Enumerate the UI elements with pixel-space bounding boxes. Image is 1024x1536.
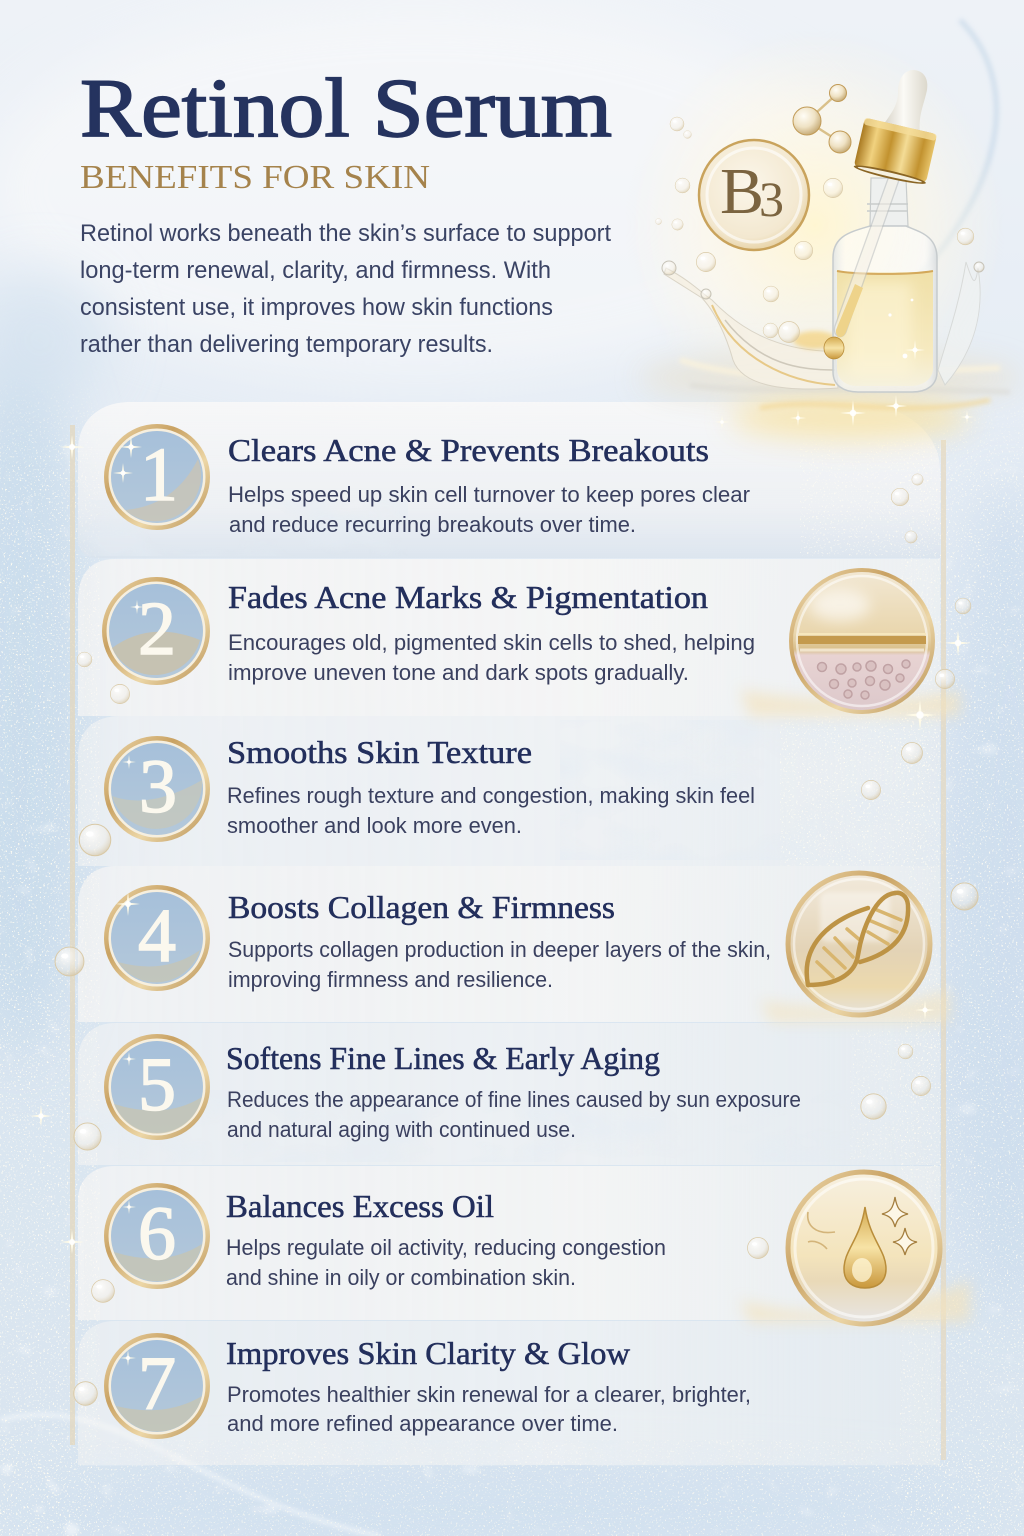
row 4 text: Boosts Collagen & Firmness [228, 889, 615, 925]
water surface under bottle [640, 352, 1020, 440]
icon: skin layers [791, 570, 933, 712]
medallion 6: 6 [138, 1192, 176, 1276]
row 1 text: Helps speed up skin cell turnover to keep pores clear [228, 482, 750, 507]
row 4 text [228, 889, 771, 992]
bottle neck [870, 178, 908, 226]
row 3 text: Refines rough texture and congestion, making skin feel [227, 783, 755, 808]
hero glow behind bottle [625, 30, 1005, 420]
panel: row 5 [78, 1023, 940, 1165]
row sparkle dust [780, 440, 940, 1160]
intro text: Retinol works beneath the skin’s surface to support [80, 220, 611, 247]
row 7 text: Promotes healthier skin renewal for a clearer, brighter, [227, 1382, 751, 1407]
row 5 text: Softens Fine Lines & Early Aging [226, 1040, 660, 1076]
row 2 text: improve uneven tone and dark spots gradually. [228, 660, 689, 685]
icon: serum bottle [824, 70, 937, 392]
row 4 text: Supports collagen production in deeper layers of the skin, [228, 937, 771, 962]
panel: benefit rows [78, 402, 940, 1465]
panel: row 2 [78, 559, 940, 716]
dropper bulb [884, 70, 927, 134]
water gleam under icons [740, 690, 970, 1322]
row 1 text [228, 432, 750, 537]
row 7 text: Improves Skin Clarity & Glow [226, 1335, 630, 1371]
panel: row 7 [78, 1321, 940, 1465]
gold cap [853, 118, 937, 187]
row 2 text: Encourages old, pigmented skin cells to shed, helping [228, 630, 755, 655]
row 6 text: Helps regulate oil activity, reducing congestion [226, 1235, 666, 1260]
row 3 text: smoother and look more even. [227, 813, 522, 838]
panel: row 3 [78, 716, 940, 866]
side bubbles [55, 474, 978, 1405]
row 6 text [226, 1188, 666, 1290]
row 3 text: Smooths Skin Texture [227, 734, 532, 770]
medallion 5: 5 [138, 1043, 176, 1127]
row 6 text: Balances Excess Oil [226, 1188, 494, 1224]
side rails [70, 425, 946, 1460]
icon: oil drop [788, 1172, 940, 1324]
title: Retinol Serum [80, 62, 612, 155]
intro text: rather than delivering temporary results. [80, 331, 493, 358]
row 2 text [228, 579, 755, 685]
bottle body [833, 226, 937, 392]
medallion 3 [104, 736, 210, 842]
icon: B3 badge: B [720, 155, 764, 228]
intro text: consistent use, it improves how skin functions [80, 294, 553, 321]
medallion 2: 2 [138, 587, 176, 671]
row 2 text: Fades Acne Marks & Pigmentation [228, 579, 708, 615]
header bubbles [655, 117, 974, 342]
icon: B3 badge [699, 140, 809, 250]
row 6 text: and shine in oily or combination skin. [226, 1265, 576, 1290]
soft clouds over rows [78, 500, 940, 1466]
icon: B3 badge: 3 [759, 171, 784, 227]
panel: row 4 [78, 866, 940, 1022]
medallion 6 [104, 1183, 210, 1289]
intro text: long-term renewal, clarity, and firmness. With [80, 257, 551, 284]
side sparkles [30, 435, 971, 1254]
row 5 text [226, 1040, 801, 1142]
row 7 text [226, 1335, 751, 1436]
splash [662, 261, 984, 389]
hero sparkles [715, 340, 974, 429]
row 1 text: and reduce recurring breakouts over time. [229, 512, 636, 537]
row 5 text: Reduces the appearance of fine lines caused by sun exposure [227, 1087, 801, 1112]
medallion 2 [102, 577, 210, 685]
medallion 7: 7 [138, 1342, 176, 1426]
pipette [834, 176, 899, 337]
row 4 text: improving firmness and resilience. [228, 967, 553, 992]
medallion 4: 4 [138, 894, 176, 978]
icon: collagen helix [788, 873, 930, 1015]
row 5 text: and natural aging with continued use. [227, 1117, 576, 1142]
panel: row 1 [78, 402, 940, 558]
intro text [80, 220, 611, 358]
medallion 4 [104, 885, 210, 991]
medallion 5 [104, 1034, 210, 1140]
subtitle: BENEFITS FOR SKIN [80, 159, 430, 196]
panel: row 6 [78, 1166, 940, 1320]
row 3 text [227, 734, 755, 838]
serum liquid [837, 271, 933, 386]
row 7 text: and more refined appearance over time. [227, 1411, 618, 1436]
medallion 7 [104, 1333, 210, 1439]
medallion 1 [104, 424, 210, 530]
icon: molecule [793, 84, 851, 153]
row 1 text: Clears Acne & Prevents Breakouts [228, 432, 709, 468]
medallion 3: 3 [139, 745, 177, 829]
sparkle dust [0, 370, 1024, 1536]
droplet [824, 337, 844, 359]
medallion 1: 1 [140, 433, 178, 517]
